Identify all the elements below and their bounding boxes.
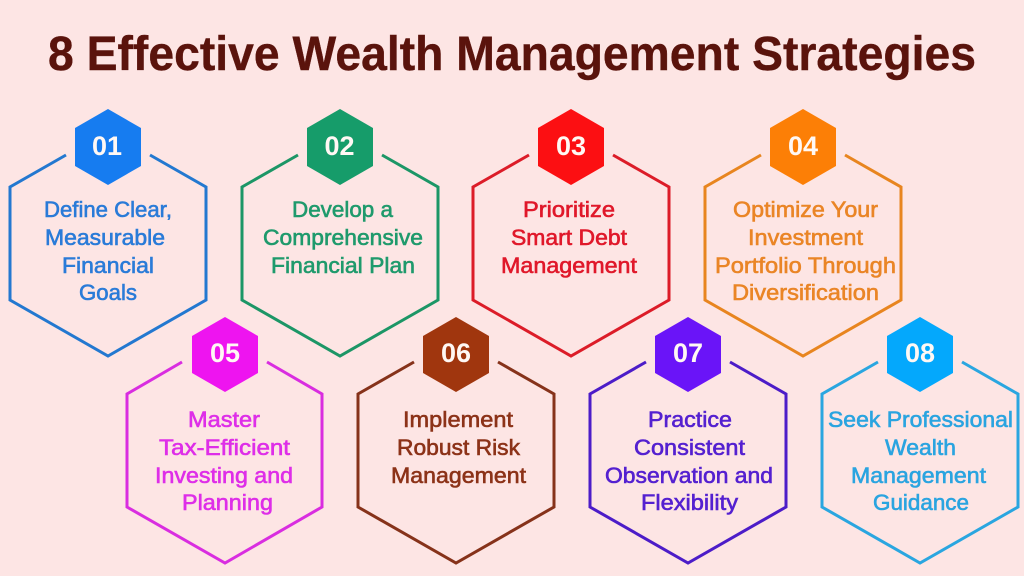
text: strategy 04: Diversification xyxy=(732,280,879,305)
number badge 02 xyxy=(307,109,373,185)
text: strategy 08: Management xyxy=(851,463,986,488)
hexagon outline 03 xyxy=(473,155,669,356)
hexagon outline 08 xyxy=(822,362,1018,563)
text: strategy 07: Flexibility xyxy=(641,490,738,515)
text: strategy 04: Optimize Your xyxy=(733,197,878,222)
text: strategy 06: Robust Risk xyxy=(397,435,521,460)
text: strategy 07: Observation and xyxy=(605,463,773,488)
panel: strategy 07 xyxy=(590,317,786,563)
number badge 03 xyxy=(538,109,604,185)
hexagon outline 06 xyxy=(358,362,554,563)
text: strategy 03: Management xyxy=(501,253,637,278)
text: strategy 02 xyxy=(263,197,423,278)
text: strategy 02: Develop a xyxy=(292,197,394,222)
number badge 08: 08 xyxy=(905,338,935,368)
text: strategy 08: Wealth xyxy=(885,435,956,460)
text: strategy 02: Financial Plan xyxy=(271,253,415,278)
hexagon outline 04 xyxy=(705,155,901,356)
text: strategy 01: Define Clear, xyxy=(44,197,172,222)
text: strategy 03: Prioritize xyxy=(523,197,615,222)
text: strategy 07: Consistent xyxy=(634,435,745,460)
number badge 05: 05 xyxy=(210,338,240,368)
text: strategy 05: Planning xyxy=(182,490,273,515)
number badge 04: 04 xyxy=(788,131,818,161)
text: strategy 05 xyxy=(155,407,293,515)
number badge 02: 02 xyxy=(324,131,355,161)
text: strategy 08: Guidance xyxy=(873,490,969,515)
number badge 06 xyxy=(423,317,489,392)
text: strategy 03 xyxy=(501,197,637,278)
panel: strategy 04 xyxy=(705,109,901,356)
text: strategy 07 xyxy=(605,407,773,515)
text: strategy 04: Portfolio Through xyxy=(715,253,896,278)
number badge 08 xyxy=(887,317,953,392)
number badge 06: 06 xyxy=(441,338,471,368)
text: strategy 04 xyxy=(715,197,896,305)
panel: strategy 02 xyxy=(242,109,438,356)
text: strategy 05: Tax-Efficient xyxy=(159,435,290,460)
panel: strategy 08 xyxy=(822,317,1018,563)
number badge 07 xyxy=(655,317,721,392)
text: strategy 08 xyxy=(828,407,1013,515)
panel: strategy 03 xyxy=(473,109,669,356)
text: strategy 01: Financial xyxy=(62,253,154,278)
number badge 01 xyxy=(75,109,141,185)
number badge 01: 01 xyxy=(92,131,122,161)
number badge 04 xyxy=(770,109,836,185)
text: strategy 02: Comprehensive xyxy=(263,225,423,250)
text: strategy 04: Investment xyxy=(748,225,863,250)
hexagon outline 07 xyxy=(590,362,786,563)
panel: strategy 06 xyxy=(358,317,554,563)
text: strategy 06: Management xyxy=(391,463,526,488)
title: 8 Effective Wealth Management Strategies xyxy=(48,28,976,81)
number badge 03: 03 xyxy=(556,131,586,161)
number badge 07: 07 xyxy=(673,338,703,368)
text: strategy 01 xyxy=(44,197,172,305)
number badge 05 xyxy=(192,317,258,392)
text: strategy 08: Seek Professional xyxy=(828,407,1013,432)
text: strategy 07: Practice xyxy=(648,407,732,432)
text: strategy 05: Investing and xyxy=(155,463,293,488)
text: strategy 05: Master xyxy=(188,407,260,432)
text: strategy 06: Implement xyxy=(403,407,513,432)
text: strategy 03: Smart Debt xyxy=(511,225,627,250)
hexagon outline 01 xyxy=(10,155,206,356)
hexagon outline 05 xyxy=(127,362,322,563)
text: strategy 01: Measurable xyxy=(45,225,165,250)
panel: strategy 05 xyxy=(127,317,322,563)
text: strategy 06 xyxy=(391,407,526,488)
text: strategy 01: Goals xyxy=(79,280,137,305)
hexagon outline 02 xyxy=(242,155,438,356)
panel: strategy 01 xyxy=(10,109,206,356)
